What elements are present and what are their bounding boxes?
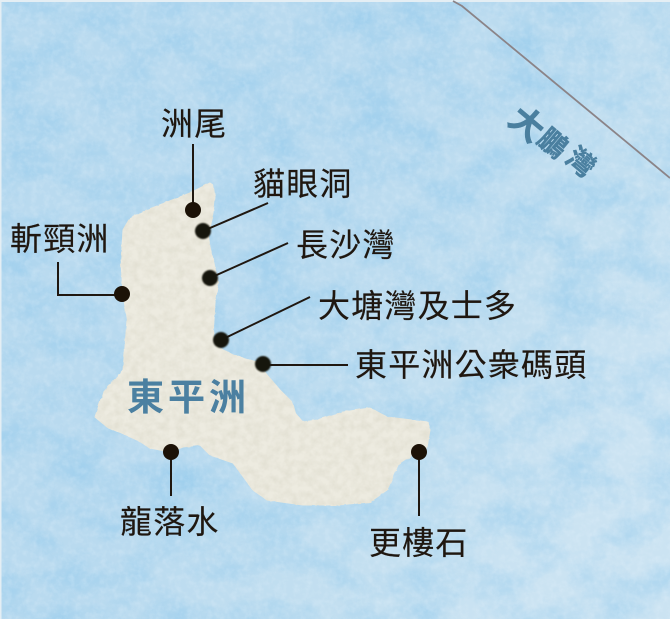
marker: 東平洲公眾碼頭 [255, 347, 587, 383]
marker: 洲尾: 洲尾 [161, 106, 227, 142]
marker: 東平洲公眾碼頭: 東平洲公衆碼頭 [355, 347, 587, 383]
bay name: Mirs Bay [501, 99, 601, 183]
island name: 東平洲 [127, 377, 250, 418]
marker: 大塘灣及士多 [213, 288, 517, 348]
marker: 龍落水: 龍落水 [120, 504, 220, 540]
marker: 龍落水 [120, 444, 220, 540]
marker: 貓眼洞 [195, 166, 353, 239]
marker: 長沙灣 [202, 227, 396, 286]
marker: 長沙灣: 長沙灣 [296, 227, 396, 263]
marker: 更樓石: 更樓石 [369, 525, 469, 561]
marker: 大塘灣及士多: 大塘灣及士多 [318, 288, 517, 324]
marker: 更樓石 [369, 444, 469, 561]
sea boundary line [453, 1, 670, 178]
bay name: Mirs Bay: 大 [501, 99, 552, 150]
marker: 洲尾 [161, 106, 227, 218]
island: Tung Ping Chau [95, 183, 430, 505]
marker: 貓眼洞: 貓眼洞 [253, 166, 353, 202]
marker: 斬頸洲 [10, 221, 130, 302]
bay name: Mirs Bay: 灣 [560, 142, 601, 183]
marker: 斬頸洲: 斬頸洲 [10, 221, 110, 257]
bay name: Mirs Bay: 鵬 [532, 123, 573, 164]
